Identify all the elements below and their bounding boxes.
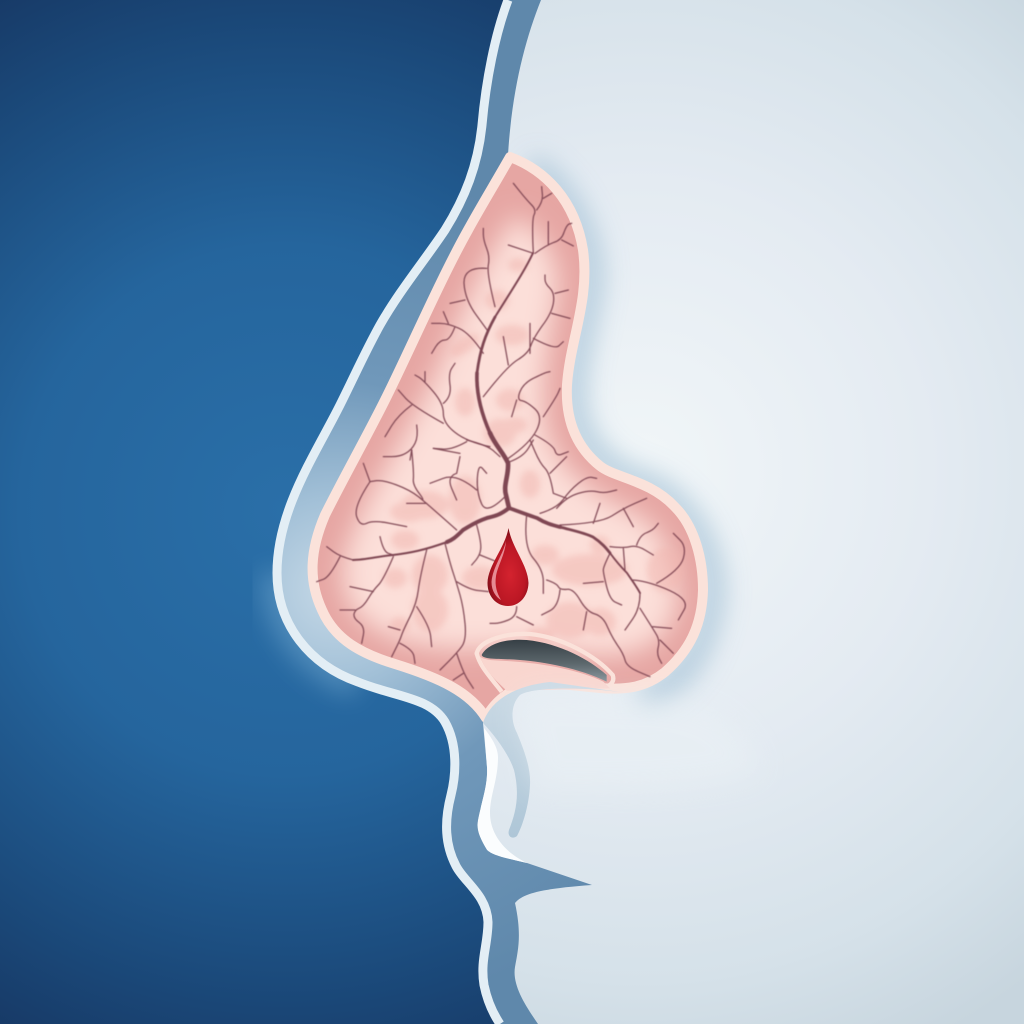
face contour band: [277, 0, 592, 1024]
alar fold: [477, 653, 502, 692]
blotches: [383, 258, 683, 643]
lip highlight: [477, 728, 527, 863]
drop highlight: [492, 541, 506, 600]
inner tissue glow: [342, 215, 683, 656]
nose fill: [313, 157, 703, 718]
background: pale face right: [400, 0, 1024, 1024]
nostril rim: [477, 634, 613, 686]
face contour white line: [277, 0, 508, 1024]
glow around nose tip on blue: [277, 573, 358, 682]
upper vessels: [383, 183, 573, 460]
philtrum shadow: [483, 682, 620, 838]
nostril: [477, 634, 613, 692]
nostril opening: [482, 640, 607, 682]
blood vessels: [317, 183, 685, 688]
upper lip light area: [519, 695, 760, 790]
blood drop: [488, 528, 528, 606]
main trunk vessels: [353, 253, 640, 593]
soft halo around nose: [530, 165, 712, 699]
lower vessels: [317, 440, 685, 688]
nose: [313, 157, 703, 718]
nose outline: [313, 157, 703, 718]
